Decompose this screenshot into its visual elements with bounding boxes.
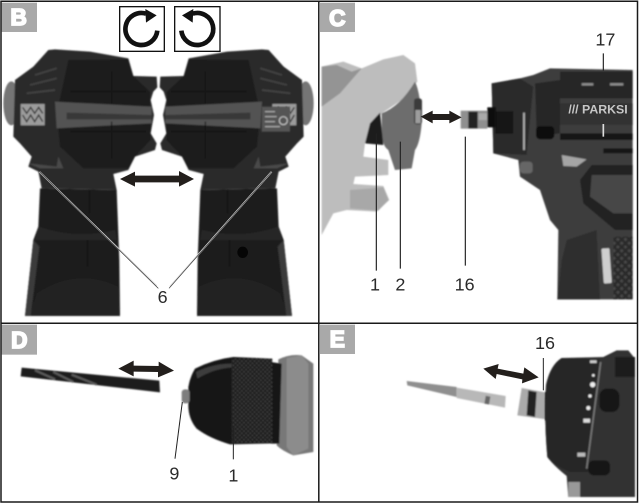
badge: E: E: [330, 326, 345, 352]
badge: C: C: [329, 5, 346, 31]
keyless chuck: [182, 355, 313, 455]
drill bit: [21, 368, 160, 392]
label 1: 1: [370, 274, 380, 294]
hand holding chuck: [322, 55, 422, 235]
leader lines: [376, 53, 603, 271]
leader line 16: [542, 358, 545, 390]
icon: screw hole: [237, 247, 248, 258]
left drill: [3, 49, 157, 316]
leader line 1: [232, 428, 235, 459]
panel: E: [320, 325, 635, 497]
badge: B: [2, 3, 37, 32]
leader lines to 6: [39, 172, 272, 288]
panel: B: [2, 3, 314, 316]
screwdriver bit: [407, 381, 506, 408]
label 1: 1: [228, 466, 238, 486]
badge: D: D: [11, 327, 28, 353]
arrow: double-headed: [421, 111, 462, 123]
badge: D: [2, 325, 37, 355]
label 17: 17: [595, 29, 615, 49]
panel: D: [2, 325, 313, 486]
icon: clockwise rotation: [120, 7, 164, 51]
label 6: 6: [158, 287, 168, 307]
label 9: 9: [169, 464, 179, 484]
label 16: 16: [455, 274, 475, 294]
leader line 9: [175, 402, 182, 459]
badge: E: [320, 325, 355, 354]
arrow: double-headed: [483, 364, 539, 383]
arrow: double-headed: [118, 361, 174, 377]
label 2: 2: [395, 274, 405, 294]
arrow: double-headed: [120, 171, 194, 187]
icon: counter-clockwise rotation: [175, 7, 220, 51]
label 16: 16: [535, 333, 555, 353]
product info label: [262, 107, 290, 132]
badge: C: [320, 3, 355, 32]
drill head: [545, 350, 635, 497]
drive bit holder: [461, 107, 496, 129]
right drill: [160, 49, 314, 316]
bit holder: [517, 388, 555, 420]
brand text: /// PARKSI: [568, 103, 628, 117]
badge: B: B: [10, 4, 27, 30]
panel: C: [320, 3, 633, 299]
drill body: [492, 68, 633, 299]
